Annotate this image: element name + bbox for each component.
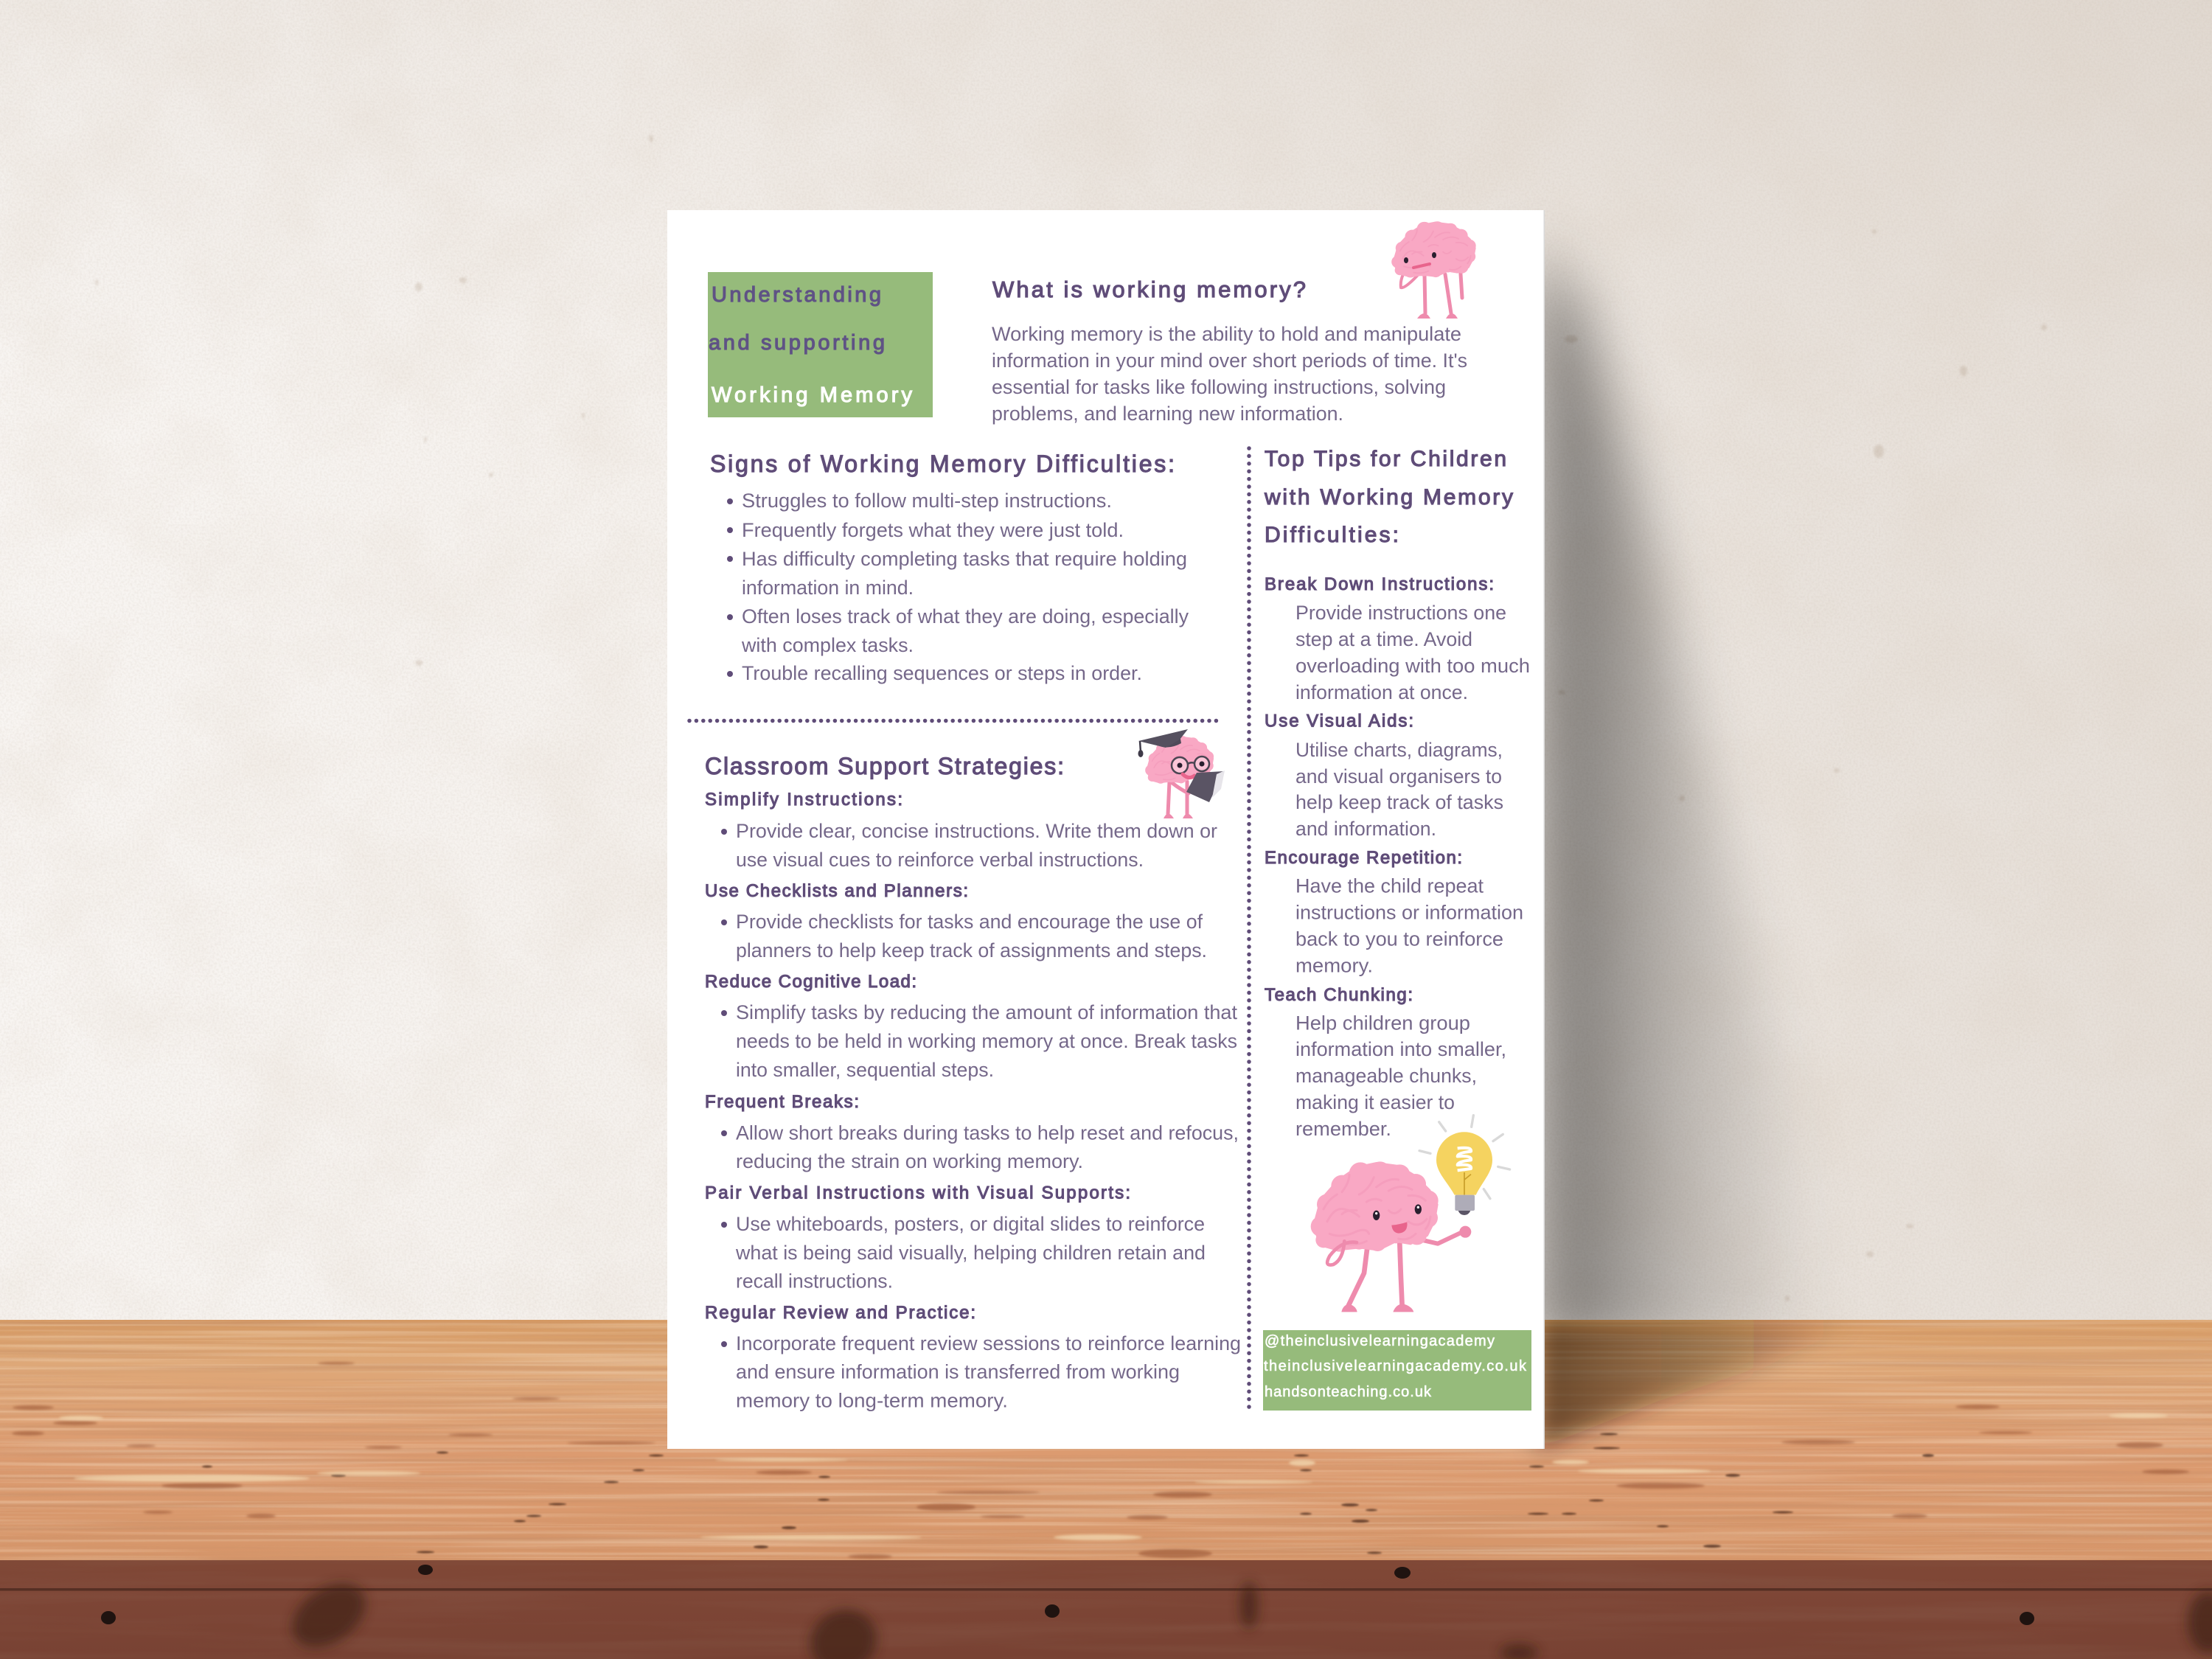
section: top tips: Difficulties:	[1265, 523, 1399, 547]
title block: Understanding	[712, 283, 881, 307]
strategy: frequent breaks	[705, 1092, 1239, 1172]
tip: use visual aids: and visual organisers to	[1295, 765, 1502, 787]
strategy: pair verbal with visual supports: what is being said visually, helping children retain and	[735, 1242, 1206, 1264]
strategy: checklists and planners: planners to help keep track of assignments and steps.	[736, 939, 1207, 961]
section: top tips: Top Tips for Children	[1265, 447, 1506, 471]
section: top tips	[1264, 447, 1530, 1140]
tip: teach chunking: Help children group	[1295, 1012, 1470, 1034]
strategy: regular review and practice: Incorporate frequent review sessions to reinforce learning	[736, 1332, 1241, 1354]
section: signs of working memory difficulties	[710, 451, 1189, 684]
strategy: pair verbal with visual supports	[705, 1183, 1206, 1292]
tip: teach chunking: information into smaller,	[1295, 1038, 1506, 1060]
bullet list: signs: Frequently forgets what they were just told.	[742, 519, 1124, 541]
strategy: pair verbal with visual supports: Pair Verbal Instructions with Visual Supports:	[705, 1183, 1130, 1203]
icon: graduate brain with book	[1138, 729, 1225, 818]
tip: teach chunking: manageable chunks,	[1295, 1065, 1477, 1087]
tip: use visual aids	[1265, 711, 1503, 840]
tip: teach chunking: remember.	[1295, 1118, 1391, 1140]
section: signs of working memory difficulties: Signs of Working Memory Difficulties:	[710, 451, 1175, 477]
strategy: reduce cognitive load	[705, 972, 1237, 1081]
strategy: pair verbal with visual supports: recall instructions.	[736, 1270, 893, 1292]
section: what is working memory	[992, 276, 1467, 425]
strategy: reduce cognitive load: into smaller, sequential steps.	[736, 1059, 994, 1081]
icon: smiling brain	[1311, 1161, 1471, 1312]
section: what is working memory: essential for tasks like following instructions, solving	[992, 376, 1446, 398]
tip: encourage repetition: instructions or information	[1295, 901, 1523, 923]
bullet list: signs: Often loses track of what they are doing, especially	[742, 605, 1189, 627]
tip: use visual aids: help keep track of tasks	[1295, 791, 1503, 813]
tip: break down instructions: step at a time. Avoid	[1295, 628, 1472, 650]
footer: contact links	[1263, 1330, 1531, 1411]
tip: teach chunking: making it easier to	[1295, 1091, 1455, 1113]
strategy: reduce cognitive load: Reduce Cognitive Load:	[705, 972, 917, 992]
strategy: reduce cognitive load: needs to be held in working memory at once. Break tasks	[736, 1030, 1237, 1052]
strategy: regular review and practice: memory to long-term memory.	[736, 1389, 1008, 1411]
tip: encourage repetition	[1265, 848, 1523, 976]
panel: white poster card	[667, 210, 1545, 1449]
bullet list: signs: with complex tasks.	[741, 634, 914, 656]
strategy: regular review and practice	[705, 1303, 1241, 1411]
strategy: reduce cognitive load: Simplify tasks by reducing the amount of information that	[736, 1001, 1237, 1023]
section: top tips: with Working Memory	[1264, 485, 1513, 509]
section: what is working memory: information in your mind over short periods of time. It's	[992, 349, 1467, 372]
tip: break down instructions: information at once.	[1295, 681, 1468, 703]
strategy: checklists and planners: Provide checklists for tasks and encourage the use of	[736, 911, 1203, 933]
tip: break down instructions: overloading with too much	[1295, 655, 1530, 677]
strategy: frequent breaks: Allow short breaks during tasks to help reset and refocus,	[736, 1122, 1239, 1144]
footer: contact links: theinclusivelearningacademy.co.uk	[1264, 1358, 1527, 1374]
bullet list: signs: Trouble recalling sequences or steps in order.	[742, 662, 1142, 684]
tip: encourage repetition: back to you to reinforce	[1295, 928, 1503, 950]
bullet list: signs: Has difficulty completing tasks that require holding	[742, 548, 1187, 570]
title block: and supporting	[709, 331, 885, 355]
footer: contact links: handsonteaching.co.uk	[1265, 1384, 1432, 1400]
section: what is working memory: problems, and learning new information.	[992, 403, 1343, 425]
strategy: checklists and planners	[705, 881, 1207, 961]
bullet list: signs: information in mind.	[742, 577, 914, 599]
strategy: regular review and practice: Regular Review and Practice:	[705, 1303, 975, 1323]
tip: use visual aids: Use Visual Aids:	[1265, 711, 1413, 731]
strategy: simplify instructions: Simplify Instructions:	[705, 790, 902, 810]
title block	[708, 272, 933, 417]
tip: encourage repetition: memory.	[1295, 954, 1373, 976]
tip: break down instructions: Break Down Instructions:	[1265, 574, 1494, 594]
tip: use visual aids: and information.	[1295, 818, 1436, 840]
footer: contact links: @theinclusivelearningacademy	[1265, 1333, 1495, 1349]
background: wooden table front edge	[0, 1560, 2212, 1659]
tip: break down instructions	[1265, 574, 1530, 703]
strategy: checklists and planners: Use Checklists and Planners:	[705, 881, 968, 901]
icon: brain with light bulb	[1311, 1116, 1510, 1312]
section: classroom support strategies	[705, 753, 1241, 1411]
strategy: regular review and practice: and ensure information is transferred from working	[736, 1361, 1180, 1383]
tip: break down instructions: Provide instructions one	[1295, 602, 1506, 624]
section: classroom support strategies: Classroom Support Strategies:	[705, 753, 1064, 779]
strategy: simplify instructions	[705, 790, 1217, 871]
strategy: frequent breaks: reducing the strain on working memory.	[736, 1150, 1083, 1172]
icon: light bulb	[1419, 1116, 1510, 1215]
tip: use visual aids: Utilise charts, diagrams,	[1295, 739, 1503, 761]
tip: encourage repetition: Have the child repeat	[1295, 874, 1484, 897]
bullet list: signs: Struggles to follow multi-step instructions.	[742, 490, 1112, 512]
section: what is working memory: Working memory is the ability to hold and manipulate	[992, 323, 1461, 345]
strategy: simplify instructions: use visual cues to reinforce verbal instructions.	[736, 849, 1144, 871]
strategy: simplify instructions: Provide clear, concise instructions. Write them down or	[736, 820, 1217, 842]
tip: teach chunking	[1265, 985, 1506, 1140]
tip: teach chunking: Teach Chunking:	[1265, 985, 1413, 1005]
icon: thinking brain	[1391, 221, 1476, 319]
strategy: frequent breaks: Frequent Breaks:	[705, 1092, 859, 1112]
strategy: pair verbal with visual supports: Use whiteboards, posters, or digital slides to reinforce	[736, 1213, 1205, 1235]
section: what is working memory: What is working memory?	[992, 276, 1306, 302]
background: wooden table top	[0, 1316, 2212, 1560]
title block: Working Memory	[712, 383, 913, 407]
bullet list: signs	[727, 490, 1189, 684]
tip: encourage repetition: Encourage Repetition:	[1265, 848, 1462, 868]
